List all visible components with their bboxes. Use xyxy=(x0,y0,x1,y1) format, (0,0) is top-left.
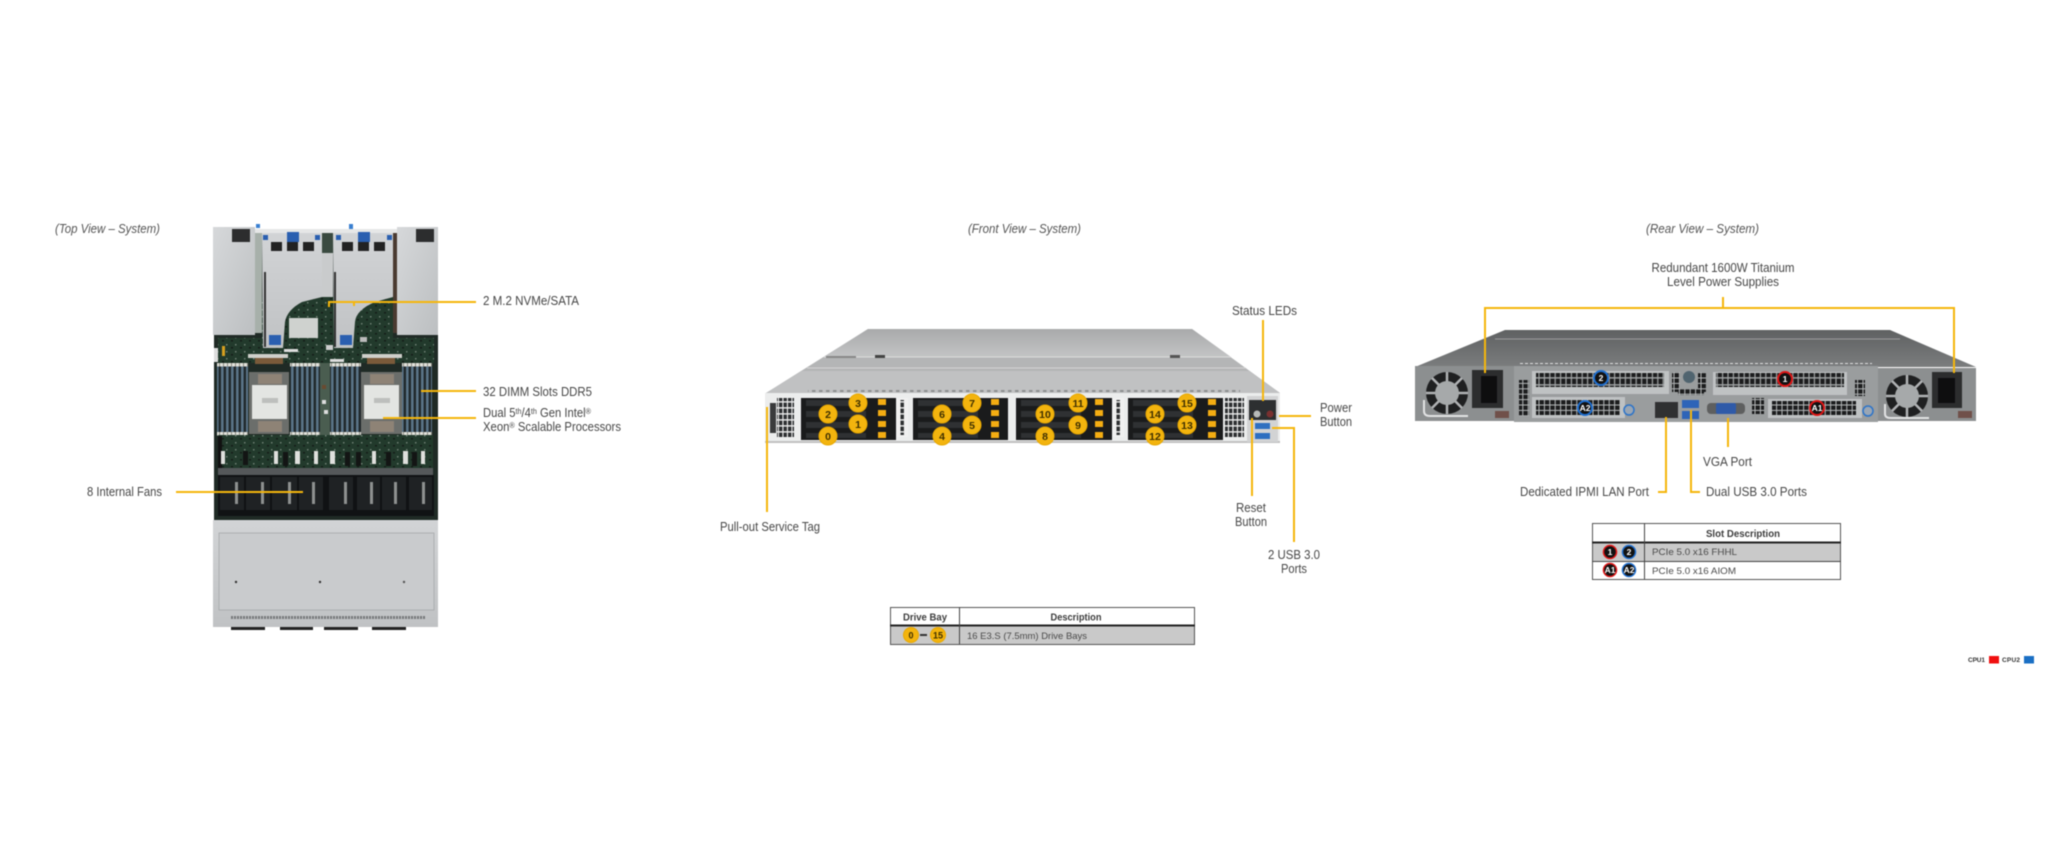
panel: rear view xyxy=(1415,222,2034,664)
drive numbers: 14 xyxy=(1149,409,1161,421)
dimm slots xyxy=(217,363,432,436)
PCIe slots xyxy=(1532,371,1847,395)
callout: dual USB xyxy=(1691,410,1807,499)
callout: DIMM slots: 32 DIMM Slots DDR5 xyxy=(483,385,592,399)
riser: outer left xyxy=(213,227,255,335)
callout: status LEDs: Status LEDs xyxy=(1232,304,1297,318)
table: drive bay: 15 xyxy=(933,630,943,640)
drive bays xyxy=(801,398,1223,440)
cpu sockets xyxy=(249,372,402,434)
callout: dual USB: Dual USB 3.0 Ports xyxy=(1706,485,1807,499)
callout: processors: Gen Intel xyxy=(537,406,586,420)
table: drive bay xyxy=(890,607,1195,644)
LAN port xyxy=(1655,402,1678,418)
callout: processors: th xyxy=(516,407,522,416)
drive numbers: 7 xyxy=(969,398,975,410)
drive numbers xyxy=(819,394,1196,445)
VGA port xyxy=(1707,403,1745,414)
drive numbers: 11 xyxy=(1072,398,1084,410)
table: slot description: Slot Description xyxy=(1706,529,1780,540)
chassis photo: front view xyxy=(765,329,1280,443)
callout: reset button xyxy=(1235,418,1267,529)
drive numbers: 5 xyxy=(969,420,975,432)
drive numbers: 4 xyxy=(939,431,945,443)
table: slot description: 1 xyxy=(1608,547,1613,557)
drive numbers: 2 xyxy=(825,409,831,421)
drive numbers: 9 xyxy=(1075,420,1081,432)
callout: USB ports: Ports xyxy=(1281,562,1307,576)
table: drive bay: 16 E3.S (7.5mm) Drive Bays xyxy=(967,631,1087,642)
callout: power supplies xyxy=(1485,261,1954,373)
legend: CPU colours: CPU1 xyxy=(1968,657,1985,664)
callout: processors: /4 xyxy=(522,406,531,420)
callout: IPMI LAN port xyxy=(1520,417,1666,499)
riser: inner left xyxy=(262,233,322,348)
legend: CPU colours: CPU2 xyxy=(2002,657,2020,664)
table: drive bay: Description xyxy=(1050,612,1102,624)
panel: front view xyxy=(720,222,1352,644)
table: slot description: A1 xyxy=(1605,565,1616,575)
drive numbers: 10 xyxy=(1039,409,1051,421)
internal fans xyxy=(218,475,434,516)
table: drive bay: Drive Bay xyxy=(903,612,947,624)
chassis photo: top view xyxy=(213,224,438,630)
table: slot description: A2 xyxy=(1624,565,1635,575)
USB ports xyxy=(1682,400,1699,408)
table: slot description: 2 xyxy=(1627,547,1632,557)
top cover xyxy=(213,520,438,630)
title: rear view: (Rear View – System) xyxy=(1646,222,1759,236)
service tag xyxy=(770,403,776,433)
riser: outer right xyxy=(397,227,438,335)
callout: USB ports: 2 USB 3.0 xyxy=(1268,548,1320,562)
callout: reset button: Button xyxy=(1235,515,1267,529)
callout: VGA port xyxy=(1703,418,1752,469)
center panel xyxy=(1514,366,1878,422)
callout: power button xyxy=(1279,401,1352,429)
slot markers: 1 xyxy=(1783,374,1788,384)
title: top view: (Top View – System) xyxy=(55,222,160,236)
callout: processors xyxy=(383,406,621,434)
drive numbers: 0 xyxy=(825,431,831,443)
slot markers: A2 xyxy=(1580,403,1591,413)
callout: status LEDs xyxy=(1232,304,1297,401)
callout: VGA port: VGA Port xyxy=(1703,455,1752,469)
drive numbers: 12 xyxy=(1149,431,1161,443)
USB ports xyxy=(1255,423,1270,429)
callout: processors: Scalable Processors xyxy=(515,420,621,434)
callout: M.2: 2 M.2 NVMe/SATA xyxy=(483,294,580,308)
slot markers: 2 xyxy=(1599,373,1604,383)
callout: processors: th xyxy=(531,407,537,416)
callout: service tag xyxy=(720,407,820,534)
callout: USB ports xyxy=(1268,428,1320,576)
panel: top view xyxy=(55,222,621,630)
title: front view: (Front View – System) xyxy=(968,222,1081,236)
PSU right xyxy=(1878,368,1976,421)
callout: processors: ® xyxy=(586,407,591,416)
drive LEDs xyxy=(878,399,1216,438)
callout: reset button: Reset xyxy=(1236,501,1266,515)
slot markers xyxy=(1578,371,1824,415)
control panel xyxy=(1247,396,1278,442)
drive numbers: 15 xyxy=(1181,398,1193,410)
drive numbers: 13 xyxy=(1181,420,1193,432)
chassis photo: rear view xyxy=(1415,330,1976,422)
table: drive bay: 0 xyxy=(908,630,914,640)
legend: CPU colours xyxy=(1968,656,2034,664)
AIOM slots xyxy=(1532,397,1862,418)
callout: IPMI LAN port: Dedicated IPMI LAN Port xyxy=(1520,485,1649,499)
drive numbers: 6 xyxy=(939,409,945,421)
slot markers: A1 xyxy=(1812,403,1823,413)
riser: inner right xyxy=(333,233,393,348)
callout: power button: Button xyxy=(1320,415,1352,429)
callout: M.2 xyxy=(329,294,580,308)
callout: power button: Power xyxy=(1320,401,1352,415)
table: slot description: PCIe 5.0 x16 AIOM xyxy=(1652,566,1736,577)
callout: processors: ® xyxy=(509,421,515,430)
callout: fans: 8 Internal Fans xyxy=(87,485,162,499)
callout: service tag: Pull-out Service Tag xyxy=(720,520,820,534)
drive numbers: 1 xyxy=(855,419,861,431)
callout: power supplies: Level Power Supplies xyxy=(1667,275,1779,289)
callout: processors: Dual 5 xyxy=(483,406,519,420)
drive numbers: 8 xyxy=(1042,431,1048,443)
PSU left xyxy=(1415,366,1514,421)
callout: processors: Xeon xyxy=(483,420,512,434)
callout: power supplies: Redundant 1600W Titanium xyxy=(1652,261,1794,275)
drive numbers: 3 xyxy=(855,398,861,410)
table: slot description: PCIe 5.0 x16 FHHL xyxy=(1652,547,1737,558)
table: slot description xyxy=(1592,523,1841,580)
